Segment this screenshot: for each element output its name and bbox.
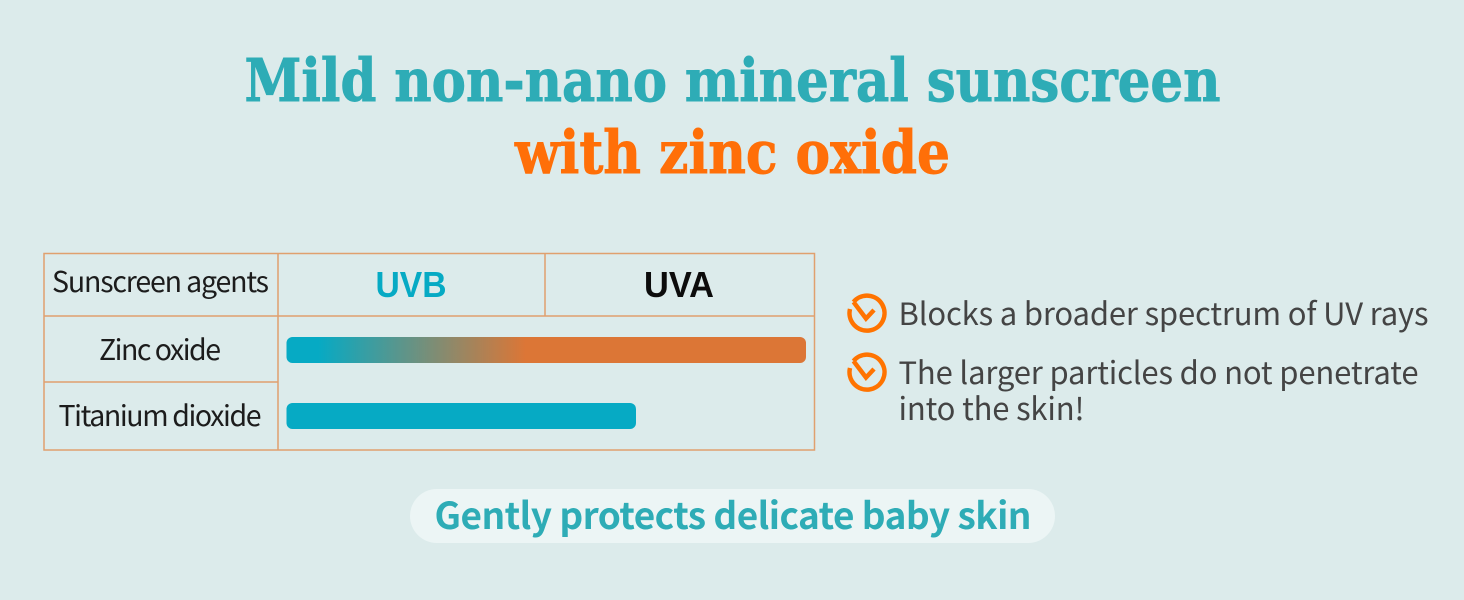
header: UVA: UVA bbox=[644, 264, 714, 305]
row label: titanium dioxide: Titanium dioxide bbox=[58, 394, 262, 435]
title: Mild non-nano mineral sunscreen bbox=[244, 46, 1220, 115]
bar: zinc oxide UVB and UVA bbox=[286, 337, 806, 363]
header: sunscreen agents: Sunscreen agents bbox=[52, 260, 269, 301]
comparison table bbox=[44, 254, 815, 450]
bar: titanium dioxide UVB bbox=[286, 403, 636, 429]
table grid bbox=[44, 254, 815, 450]
icon: check circle bbox=[850, 355, 885, 390]
benefit 2: The larger particles do not penetrate bbox=[898, 348, 1418, 393]
callout pill: Gently protects delicate baby skin bbox=[434, 486, 1032, 540]
benefit 1: Blocks a broader spectrum of UV rays bbox=[898, 289, 1428, 334]
title: with zinc oxide bbox=[514, 118, 950, 187]
benefit 2: into the skin! bbox=[898, 384, 1084, 429]
header: UVB: UVB bbox=[376, 264, 446, 305]
icon: check circle bbox=[850, 296, 885, 331]
row label: zinc oxide: Zinc oxide bbox=[99, 328, 221, 369]
benefit 2 bbox=[850, 348, 1418, 429]
title bbox=[244, 46, 1220, 187]
